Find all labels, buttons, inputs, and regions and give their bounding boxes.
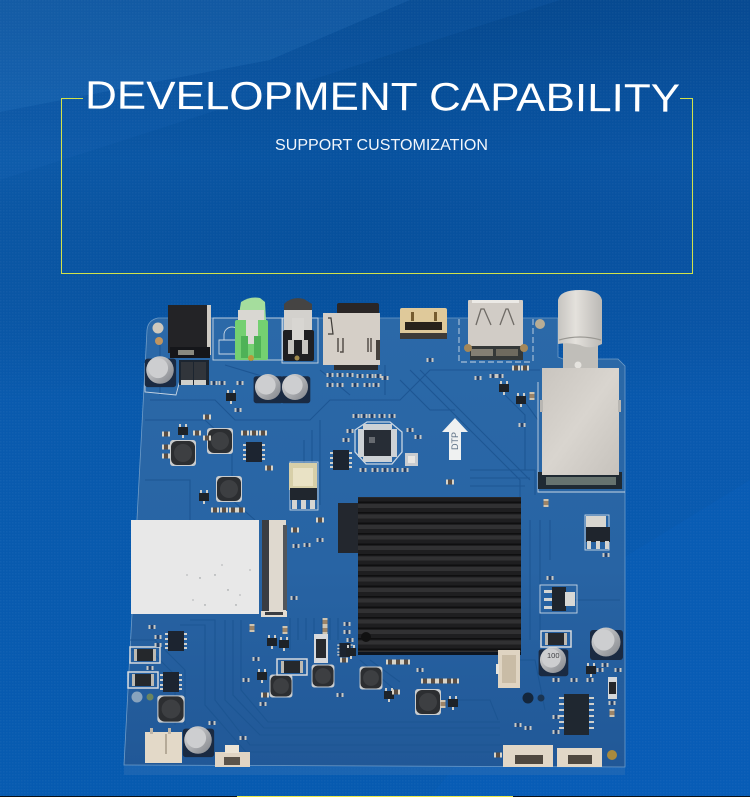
- SOP chip beside QFP: [330, 450, 352, 470]
- passive SMD parts: [146, 358, 622, 760]
- direction arrow with DTP label: [442, 418, 468, 460]
- silkscreen outlines: [145, 318, 625, 613]
- USB connector: [464, 300, 528, 360]
- heatsink: [338, 497, 521, 655]
- mounting holes: [132, 319, 617, 760]
- SOIC chips: [160, 442, 594, 735]
- BNC connector: [558, 290, 602, 370]
- traces: [130, 340, 620, 752]
- main QFP chip: [358, 424, 397, 462]
- power jack: [168, 305, 211, 358]
- power inductors: [157, 428, 441, 723]
- bottom strip: [0, 796, 750, 797]
- SOT regulators: [178, 381, 596, 710]
- title: DEVELOPMENT CAPABILITY: [85, 74, 680, 121]
- white terminal connectors: [145, 650, 602, 767]
- light diagonal band: [0, 0, 410, 112]
- capacitor marking: 100: [547, 651, 560, 660]
- circuit board: [124, 290, 625, 775]
- black audio jack: [283, 298, 314, 361]
- white insulating pad: [131, 520, 259, 614]
- pcb: [124, 318, 625, 767]
- FFC connector: [261, 520, 287, 617]
- small crystal: [405, 453, 418, 466]
- diodes: [128, 360, 617, 699]
- SD card slot: [323, 303, 380, 370]
- subtitle: SUPPORT CUSTOMIZATION: [275, 137, 488, 154]
- direction arrow with DTP label: DTP: [450, 432, 460, 450]
- electrolytic capacitors: [145, 356, 623, 757]
- tuner can: [538, 368, 622, 489]
- regulator with shield: [289, 463, 317, 509]
- green audio jack: [235, 298, 268, 361]
- HDMI connector: [400, 308, 447, 339]
- power regulators: [544, 516, 610, 611]
- header frame: [62, 98, 692, 274]
- board reflection: [124, 764, 625, 775]
